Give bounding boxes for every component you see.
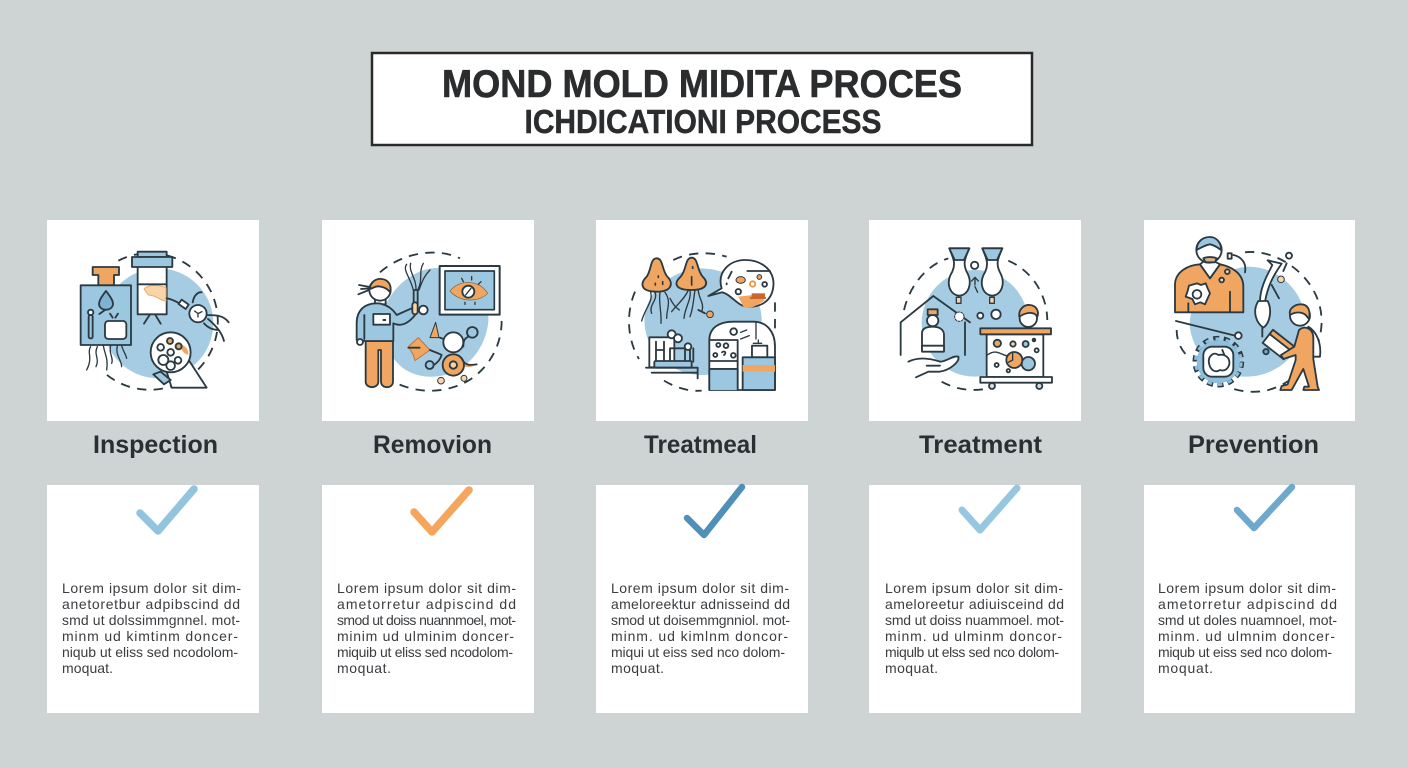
panel: inspection description: moquat. <box>62 660 113 676</box>
panel: treatmeal description: miqui ut eiss sed nco dolom- <box>611 644 785 660</box>
panel: treatment description: smd ut doiss nuammoel. mot- <box>885 612 1064 628</box>
panel: treatment description: ameloreetur adiuisceind dd <box>885 596 1064 612</box>
panel: prevention description <box>1144 485 1355 713</box>
title box: ICHDICATIONI PROCESS <box>524 103 882 140</box>
panel: removal description: ametorretur adpiscind dd <box>337 596 516 612</box>
panel: treatment description: moquat. <box>885 660 938 676</box>
panel: prevention description: miqub ut eiss sed nco dolom- <box>1158 644 1332 660</box>
panel: removal description <box>322 485 534 713</box>
panel: removal description: miquib ut eliss sed ncodolom- <box>337 644 513 660</box>
panel: treatment description: miqulb ut elss sed nco dolom- <box>885 644 1059 660</box>
heading: Treatment: Treatment <box>919 431 1043 459</box>
panel: treatmeal description: ameloreektur adnisseind dd <box>611 596 790 612</box>
panel: prevention description: Lorem ipsum dolor sit dim- <box>1158 580 1336 596</box>
panel: inspection description <box>47 485 259 713</box>
panel: inspection description: niqub ut eliss sed ncodolom- <box>62 644 238 660</box>
panel: treatment description: Lorem ipsum dolor sit dim- <box>885 580 1063 596</box>
panel: removal description: moquat. <box>337 660 391 676</box>
panel: inspection description: smd ut dolssimmgnnel. mot- <box>62 612 240 628</box>
panel: treatmeal description <box>596 485 808 713</box>
panel: treatment description <box>869 485 1081 713</box>
title box <box>372 53 1032 145</box>
heading: Treatmeal: Treatmeal <box>644 431 757 459</box>
panel: prevention description: moquat. <box>1158 660 1213 676</box>
panel: treatmeal description: minm. ud kimlnm doncor- <box>611 628 788 644</box>
heading: Prevention: Prevention <box>1188 431 1319 459</box>
panel: inspection description: Lorem ipsum dolor sit dim- <box>62 580 241 596</box>
panel: removal description: minim ud ulminim doncer- <box>337 628 514 644</box>
panel: treatmeal description: Lorem ipsum dolor sit dim- <box>611 580 789 596</box>
panel: inspection description: minm ud kimtinm doncer- <box>62 628 238 644</box>
panel: removal description: Lorem ipsum dolor sit dim- <box>337 580 516 596</box>
panel: inspection description: anetoretbur adpibscind dd <box>62 596 240 612</box>
panel: prevention description: minm. ud ulmnim doncer- <box>1158 628 1335 644</box>
heading: Removion: Removion <box>373 431 492 459</box>
panel: treatmeal icon card <box>596 220 808 421</box>
panel: prevention icon card <box>1144 220 1355 421</box>
panel: removal description: smod ut doiss nuannmoel, mot- <box>337 612 516 628</box>
panel: removal icon card <box>322 220 534 421</box>
panel: treatmeal description: moquat. <box>611 660 664 676</box>
panel: inspection icon card <box>47 220 259 421</box>
panel: prevention description: smd ut doles nuamnoel, mot- <box>1158 612 1337 628</box>
heading: Inspection: Inspection <box>93 431 218 459</box>
title box: MOND MOLD MIDITA PROCES <box>442 63 962 106</box>
panel: treatmeal description: smod ut doisemmgnniol. mot- <box>611 612 790 628</box>
panel: treatment icon card <box>869 220 1081 421</box>
panel: treatment description: minm. ud ulminm doncor- <box>885 628 1062 644</box>
panel: prevention description: ametorretur adpiscind dd <box>1158 596 1337 612</box>
